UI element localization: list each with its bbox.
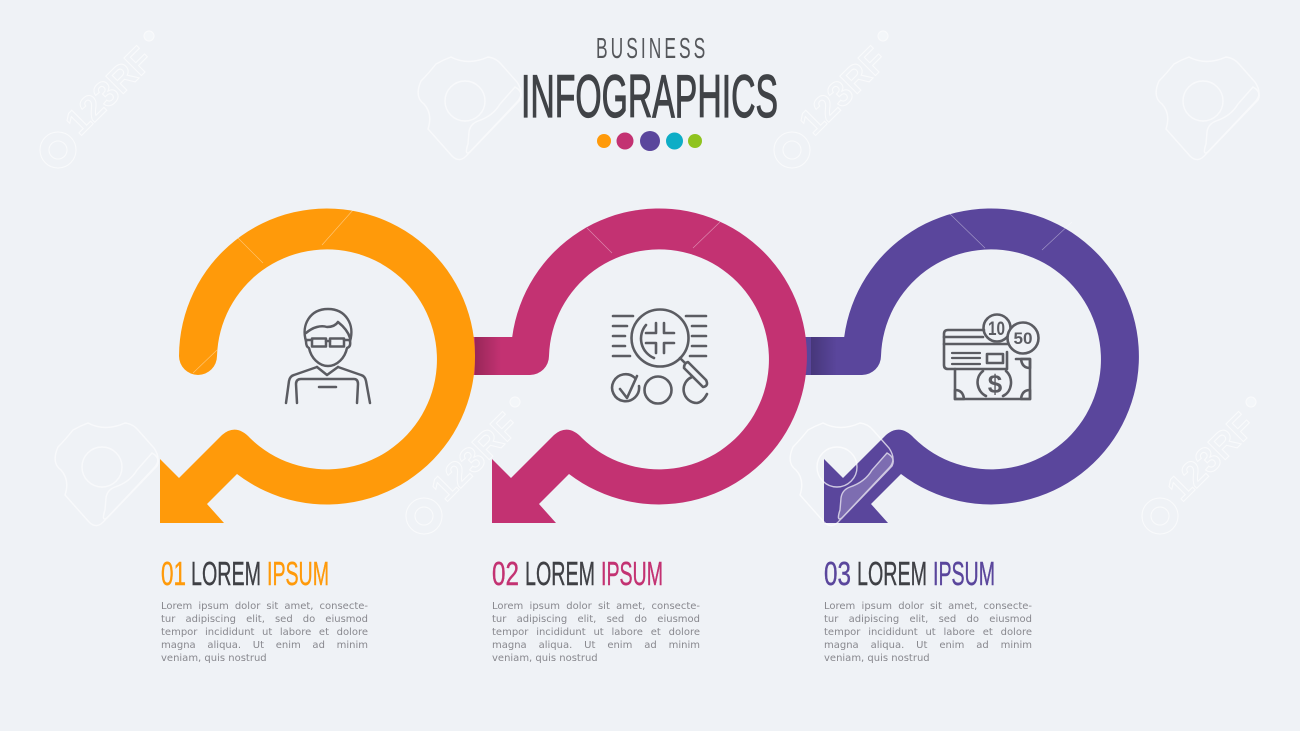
text block: step 3: magna aliqua. Ut enim ad minim	[824, 640, 1032, 651]
watermark: stamp top centre	[418, 57, 521, 160]
heading: step 2: LOREM	[525, 555, 595, 592]
text block: step 2	[492, 601, 700, 664]
text block: step 3: tur adipiscing elit, sed do eiusmod	[824, 614, 1032, 625]
watermark: 123RF top left	[40, 31, 161, 168]
heading: step 2	[492, 555, 663, 592]
icon: person with glasses	[286, 309, 370, 403]
text block: step 3: veniam, quis nostrud	[824, 653, 930, 664]
text block: step 1	[161, 601, 368, 664]
watermark: stamp top right	[1156, 57, 1259, 160]
colour dots	[597, 131, 702, 151]
text block: step 1: veniam, quis nostrud	[161, 653, 267, 664]
watermark: 123RF top centre: 123RF	[791, 39, 895, 143]
heading: infographics: INFOGRAPHICS	[521, 63, 778, 130]
heading: step 1: 01	[161, 555, 186, 592]
heading: step 2: 02	[492, 555, 519, 592]
text block: step 3: Lorem ipsum dolor sit amet, consecte-	[824, 601, 1032, 612]
text block: step 2: Lorem ipsum dolor sit amet, consecte-	[492, 601, 700, 612]
watermark: stamp bottom left	[55, 423, 158, 526]
text block: step 3	[824, 601, 1032, 664]
heading: step 1: IPSUM	[267, 555, 329, 592]
heading: step 2: IPSUM	[601, 555, 663, 592]
ring arrow 3: purple	[799, 208, 1139, 523]
text block: step 2: tur adipiscing elit, sed do eiusmod	[492, 614, 700, 625]
text block: step 3: tempor incididunt ut labore et dolore	[824, 627, 1032, 638]
heading: step 3: IPSUM	[933, 555, 995, 592]
title	[521, 33, 778, 130]
icon: card, coins and banknote	[944, 314, 1038, 399]
text block: step 2: magna aliqua. Ut enim ad minim	[492, 640, 700, 651]
watermark: 123RF top left: 123RF	[57, 39, 161, 143]
watermark: 123RF bottom centre	[406, 397, 527, 534]
coin 10: 10	[988, 319, 1005, 340]
text block: step 2: tempor incididunt ut labore et dolore	[492, 627, 700, 638]
dollar sign: $	[988, 369, 1003, 399]
heading: step 3: LOREM	[857, 555, 927, 592]
text block: step 1: tempor incididunt ut labore et dolore	[161, 627, 368, 638]
text block: step 1: tur adipiscing elit, sed do eiusmod	[161, 614, 368, 625]
watermark: 123RF bottom right	[1142, 397, 1263, 534]
watermark: 123RF top centre	[774, 31, 895, 168]
heading: step 3	[824, 555, 995, 592]
heading: step 1: LOREM	[191, 555, 261, 592]
text block: step 1: Lorem ipsum dolor sit amet, consecte-	[161, 601, 368, 612]
text block: step 1: magna aliqua. Ut enim ad minim	[161, 640, 368, 651]
coin 50: 50	[1014, 329, 1032, 348]
ring arrow 1: orange	[160, 209, 475, 523]
watermark: stamp over third arrow	[790, 423, 893, 526]
watermark: 123RF bottom right: 123RF	[1159, 405, 1263, 509]
text block: step 2: veniam, quis nostrud	[492, 653, 598, 664]
watermark: 123RF bottom centre: 123RF	[423, 405, 527, 509]
ring arrow 2: magenta	[467, 208, 807, 523]
icon: magnifier with checklist	[612, 310, 707, 404]
heading: step 1	[161, 555, 329, 592]
heading: business: BUSINESS	[596, 33, 705, 65]
heading: step 3: 03	[824, 555, 851, 592]
